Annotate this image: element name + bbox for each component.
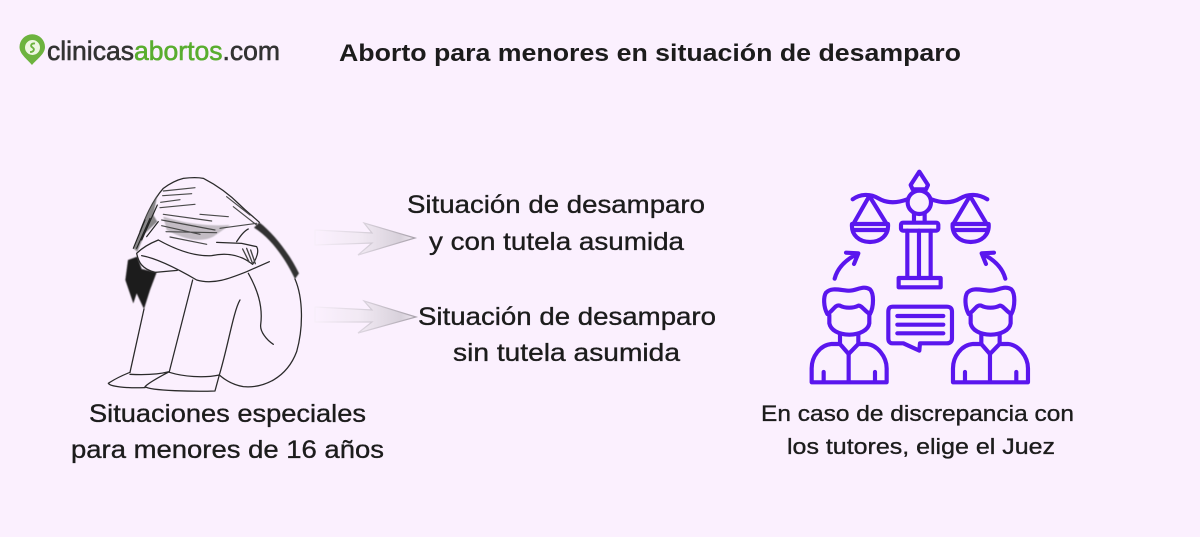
illustration: girl hugging her knees xyxy=(108,178,301,391)
hair outline and strands xyxy=(125,178,299,309)
text: sin tutela asumida: Situación de desamparo xyxy=(418,303,716,331)
arrow: to sin tutela asumida xyxy=(315,301,416,333)
arrows xyxy=(835,253,1005,279)
text: situaciones especiales: para menores de 16 años xyxy=(71,436,384,464)
icon: scales of justice with two people and speech bubble xyxy=(812,172,1028,382)
text: caption for the judge: En caso de discrepancia con xyxy=(761,401,1074,426)
icon: green location pin xyxy=(20,34,45,65)
text: con tutela asumida: y con tutela asumida xyxy=(429,228,684,256)
legs and body xyxy=(130,273,301,387)
text: situaciones especiales: Situaciones especiales xyxy=(89,400,366,428)
arms and hand xyxy=(137,229,269,282)
text: situaciones especiales xyxy=(71,400,384,464)
text: caption for the judge: los tutores, elige el Juez xyxy=(787,434,1055,459)
text: caption for the judge xyxy=(761,401,1074,459)
text: sin tutela asumida: sin tutela asumida xyxy=(453,339,680,367)
person left xyxy=(812,288,887,382)
logo: clinicasabortos.com xyxy=(20,34,280,66)
person right xyxy=(953,288,1028,382)
text: con tutela asumida: Situación de desamparo xyxy=(407,191,705,219)
text: sin tutela asumida xyxy=(418,303,716,367)
title: Aborto para menores en situación de desamparo xyxy=(339,40,961,67)
feet xyxy=(108,372,219,391)
arrow: to tutela asumida xyxy=(315,223,415,255)
scales xyxy=(852,172,989,287)
logo wordmark: clinicasabortos.com xyxy=(47,36,280,66)
speech bubble xyxy=(888,307,952,351)
text: con tutela asumida xyxy=(407,191,705,256)
